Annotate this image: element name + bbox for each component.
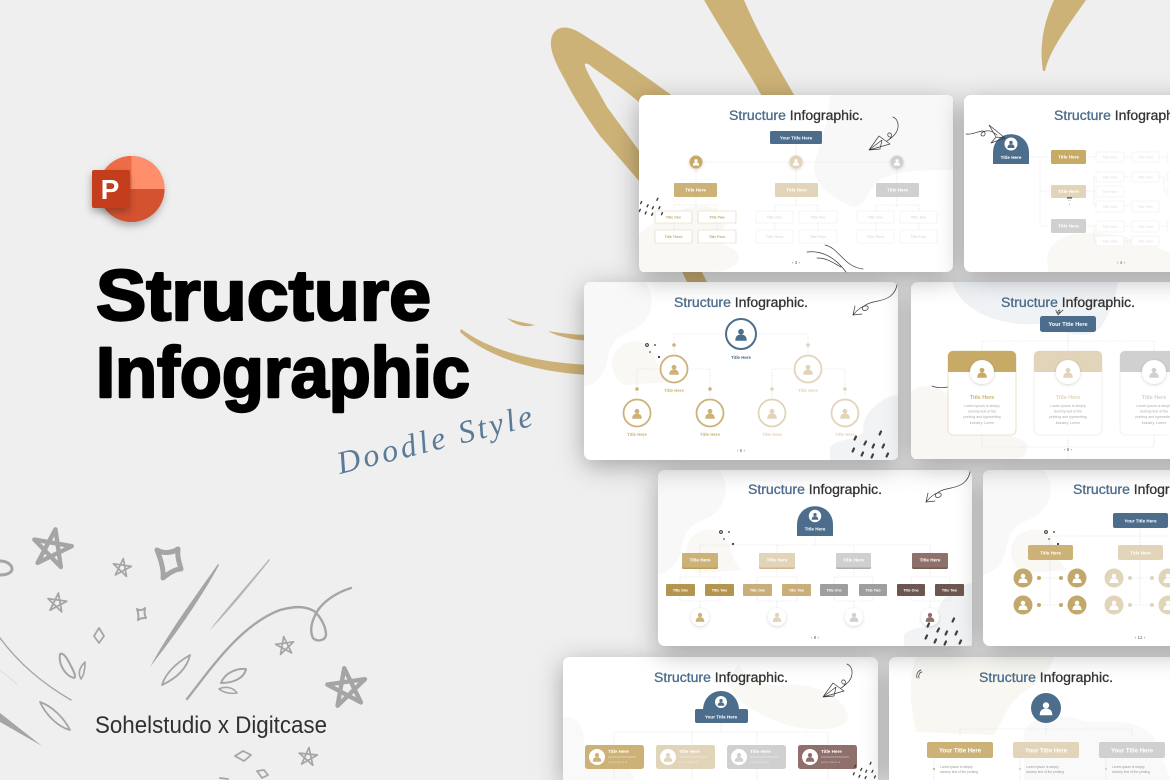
gold branch: Title Here: [627, 432, 648, 437]
page number: ‹ 12 ›: [1135, 635, 1146, 640]
rain doodle: [853, 432, 888, 458]
gold brush swooshes: [460, 0, 1086, 375]
gold leaf boxes: [655, 211, 736, 243]
cards: dummy text of the: [968, 410, 996, 414]
card row: Title Here: [750, 749, 771, 754]
bullet text: Lorem ipsum is simply: [940, 765, 973, 769]
level three boxes: Title Two: [865, 588, 881, 592]
branch boxes: [674, 183, 919, 197]
arch header: Title Here: [805, 526, 826, 532]
cards: industry. Lorem: [1056, 421, 1080, 425]
column headers: Your Title Here: [1025, 748, 1068, 754]
leaf boxes: Title Here: [1138, 205, 1153, 209]
light leaf boxes: Title Four: [910, 235, 927, 239]
gold leaf boxes: Title Two: [709, 215, 725, 219]
top person icon: [1031, 693, 1061, 723]
slide 4: profile cards: [911, 282, 1170, 459]
top box: [1113, 513, 1168, 528]
level two boxes: Title Here: [1040, 550, 1061, 556]
light branch: Title Here: [835, 432, 856, 437]
cards: printing and typesetting: [1049, 415, 1087, 419]
leaf boxes: Title Here: [1102, 225, 1118, 229]
leaf boxes: Title Here: [1138, 155, 1153, 159]
branch boxes: Title Here: [685, 188, 706, 193]
cards: industry. Lorem: [970, 421, 994, 425]
cards: dummy text of the: [1054, 410, 1082, 414]
top box: Your Title Here: [1048, 322, 1088, 328]
level two boxes: Title Here: [690, 558, 711, 562]
gold leaf boxes: Title Four: [709, 235, 726, 239]
top box: Your Title Here: [1124, 518, 1157, 524]
slide title: Structure Infographic.: [674, 295, 808, 310]
level three boxes: Title One: [826, 588, 842, 592]
arrow doodle: [853, 285, 897, 315]
column headers: Your Title Here: [1111, 748, 1154, 754]
squiggle doodle: [917, 670, 922, 678]
card row: Title Here: [679, 749, 700, 754]
dots doodle: [1045, 531, 1059, 545]
slide 5: org chart four columns: [658, 470, 972, 646]
card row: Lorem ipsum is: [750, 760, 770, 764]
person circles: [690, 156, 904, 168]
top box: [1040, 316, 1096, 332]
gold branch: Title Here: [700, 432, 721, 437]
card row: [585, 745, 857, 769]
paper plane doodle: [823, 664, 852, 697]
page number: ‹ 6 ›: [1064, 447, 1072, 452]
level three boxes: Title One: [903, 588, 919, 592]
icon: PowerPoint logo: [92, 156, 164, 222]
cards: [948, 351, 1170, 435]
squiggle doodles: [932, 310, 1063, 388]
rain doodle: [639, 198, 662, 215]
arch header: [797, 506, 833, 536]
slide 7: cards with dome header: [563, 657, 878, 780]
cards: dummy text of the: [1140, 410, 1168, 414]
arch header: [993, 134, 1029, 164]
dome header box: [695, 691, 748, 723]
leaf boxes: Title Here: [1102, 240, 1118, 244]
paper plane doodle: [966, 125, 1005, 143]
level two boxes: Title Here: [843, 558, 864, 562]
light persons: [1104, 568, 1170, 614]
credit line: Sohelstudio x Digitcase: [95, 712, 327, 739]
card row: Title Here: [608, 749, 629, 754]
slide 1: three branch tree: [639, 95, 953, 272]
level two boxes: Title Here: [920, 558, 941, 562]
title: [96, 257, 470, 413]
title: Infographic: [96, 334, 470, 413]
leaf boxes: Title Here: [1102, 175, 1118, 179]
cards: Lorem ipsum is simply: [964, 404, 1000, 408]
cards: Title Here: [1142, 395, 1166, 401]
level three boxes: Title Two: [789, 588, 805, 592]
top circle: [726, 319, 756, 360]
paper plane doodle: [869, 117, 898, 150]
gold leaf boxes: Title Three: [664, 235, 683, 239]
light leaf boxes: Title One: [767, 215, 782, 219]
gold branch: [624, 343, 847, 437]
level three boxes: Title Two: [712, 588, 728, 592]
level two boxes: [1028, 545, 1163, 560]
bullet text: dummy text of the printing: [1112, 770, 1150, 774]
slide title: Structure Infographic.: [729, 108, 863, 123]
bullet text: Lorem ipsum is simply: [1112, 765, 1145, 769]
subtitle: Doodle Style: Doodle Style: [332, 397, 536, 481]
leaf boxes: Title Here: [1138, 175, 1153, 179]
person circles: [691, 608, 939, 626]
gold leaf boxes: Title One: [666, 215, 681, 219]
top box: Your Title Here: [780, 136, 813, 140]
card row: Lorem ipsum is: [679, 760, 699, 764]
arch header: Title Here: [1001, 155, 1022, 160]
light leaf boxes: Title Two: [810, 215, 826, 219]
slide title: Structure Infographic.: [979, 670, 1113, 685]
card row: Title Here: [821, 749, 842, 754]
page number: ‹ 8 ›: [811, 635, 819, 640]
title: Structure: [96, 257, 431, 336]
rain doodle: [853, 762, 875, 778]
card row: Lorem ipsum is: [821, 760, 841, 764]
cards: Lorem ipsum is simply: [1050, 404, 1086, 408]
bullet text: dummy text of the printing: [940, 770, 978, 774]
doodle decorations: [0, 526, 368, 779]
leaf boxes: [1096, 152, 1170, 246]
slide 2: horizontal tree: [964, 95, 1170, 272]
light leaf boxes: Title Three: [866, 235, 885, 239]
page number: ‹ 5 ›: [737, 448, 745, 453]
column headers: [927, 742, 1165, 758]
level boxes: [1051, 150, 1086, 233]
slide title: Structure Infographic.: [1001, 295, 1135, 310]
light leaf boxes: Title Three: [765, 235, 784, 239]
bullet text: dummy text of the printing: [1026, 770, 1064, 774]
bullet text: [933, 758, 1150, 780]
leaf boxes: Title Here: [1102, 205, 1118, 209]
level boxes: Title Here: [1058, 224, 1079, 228]
small stacked marker: [1067, 197, 1072, 206]
level three boxes: Title One: [750, 588, 765, 592]
column headers: Your Title Here: [939, 748, 982, 754]
leaf boxes: Title Here: [1102, 190, 1118, 194]
light leaf boxes: Title Two: [911, 215, 927, 219]
rain doodle: [926, 618, 961, 644]
light branch: [758, 356, 858, 437]
level two boxes: Title Here: [767, 558, 788, 562]
cards: industry. Lorem: [1142, 421, 1166, 425]
slide 6: four person grid: [983, 470, 1170, 646]
light leaf boxes: Title Four: [810, 235, 827, 239]
bullet text: Lorem ipsum is simply: [1026, 765, 1059, 769]
cards: Title Here: [1056, 395, 1080, 401]
top box: [770, 131, 822, 144]
cards: Title Here: [970, 395, 994, 401]
slide 3: circular org chart: [584, 282, 898, 460]
branch boxes: Title Here: [887, 188, 908, 193]
light leaf boxes: Title One: [868, 215, 883, 219]
wave doodle: [807, 245, 863, 272]
level two boxes: Title Here: [1130, 550, 1151, 556]
leaf boxes: Title Here: [1138, 225, 1153, 229]
leaf boxes: Title Here: [1138, 240, 1153, 244]
card row: Lorem ipsum is: [608, 760, 628, 764]
dome header box: Your Title Here: [705, 714, 738, 720]
arrow doodle: [926, 472, 970, 502]
slide 8: title columns: [889, 657, 1170, 780]
gold persons: [1014, 568, 1086, 614]
top circle: Title Here: [731, 355, 752, 360]
page number: ‹ 3 ›: [792, 260, 800, 265]
light branch: Title Here: [762, 432, 783, 437]
icon: PowerPoint logo: P: [101, 174, 119, 205]
gold branch: Title Here: [664, 388, 685, 393]
branch boxes: Title Here: [786, 188, 807, 193]
slide title: Structure Infographic.: [748, 482, 882, 497]
level three boxes: Title One: [673, 588, 688, 592]
cards: printing and typesetting: [963, 415, 1001, 419]
slide title: Structure Infographic.: [654, 670, 788, 685]
dots doodle: [646, 344, 660, 358]
leaf boxes: Title Here: [1102, 155, 1118, 159]
level boxes: Title Here: [1058, 189, 1079, 194]
light leaf boxes: [756, 211, 937, 243]
level two boxes: [682, 553, 948, 569]
page number: ‹ 4 ›: [1117, 260, 1125, 265]
dots doodle: [720, 531, 734, 545]
level three boxes: Title Two: [942, 588, 958, 592]
level boxes: Title Here: [1058, 154, 1079, 160]
level three boxes: [666, 584, 964, 596]
light branch: Title Here: [798, 388, 819, 393]
